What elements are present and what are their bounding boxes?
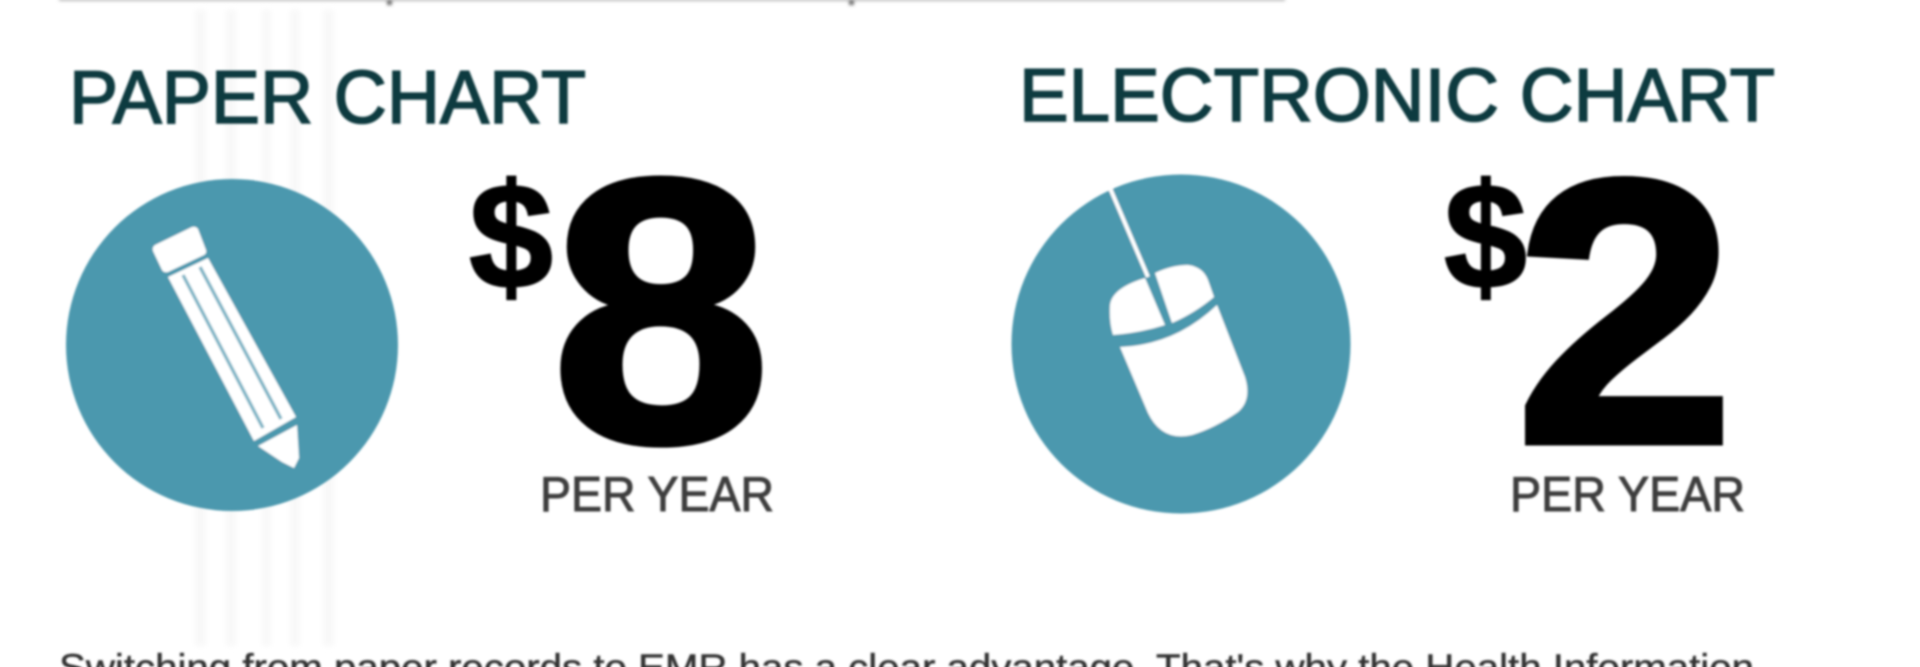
label: per year: PER YEAR [1510,468,1745,522]
panel: paper chart [66,55,774,522]
cropped text line remnant at top edge [59,0,1285,5]
price: $8: $ [469,152,553,320]
panel: electronic chart [1012,53,1775,522]
heading: paper chart: PAPER CHART [69,55,586,139]
price: $2: 2 [1515,102,1735,522]
price: $8 [469,101,771,521]
price: $8: 8 [551,101,771,521]
icon: pencil in circle [66,179,398,511]
icon: mouse in circle [1012,174,1350,514]
label: per year: PER YEAR [540,468,774,522]
price: $2: $ [1444,152,1527,320]
heading: electronic chart: ELECTRONIC CHART [1019,53,1775,137]
